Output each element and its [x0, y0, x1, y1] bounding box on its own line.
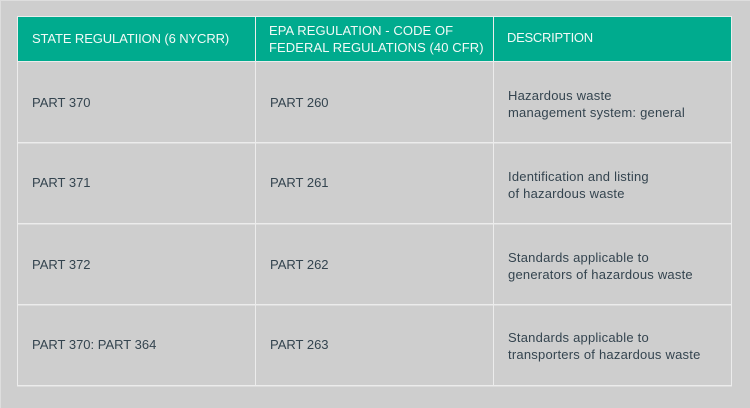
- row 4: state part: PART 370: PART 364: [32, 337, 156, 352]
- row 3: description: Standards applicable to: [508, 250, 649, 265]
- header: state regulation: STATE REGULATIION (6 NYCRR): [32, 31, 229, 46]
- row 4: description: transporters of hazardous waste: [508, 347, 701, 362]
- header: EPA regulation: EPA REGULATION - CODE OF: [269, 23, 453, 38]
- row 3: description: generators of hazardous waste: [508, 267, 693, 282]
- header: description: DESCRIPTION: [507, 30, 593, 45]
- row 2: state part: PART 371: [32, 175, 91, 190]
- table header band: [17, 16, 732, 62]
- row 4: description: Standards applicable to: [508, 330, 649, 345]
- row 1: state part: PART 370: [32, 95, 91, 110]
- row 3: description: [508, 250, 693, 282]
- row 1: description: management system: general: [508, 105, 685, 120]
- row 2: EPA part: PART 261: [270, 175, 329, 190]
- row 2: description: [508, 169, 649, 201]
- header: EPA regulation: FEDERAL REGULATIONS (40 CFR): [269, 40, 484, 55]
- row 4: EPA part: PART 263: [270, 337, 329, 352]
- row 2: description: of hazardous waste: [508, 186, 625, 201]
- row 3: EPA part: PART 262: [270, 257, 329, 272]
- row 2: description: Identification and listing: [508, 169, 649, 184]
- row 4: description: [508, 330, 701, 362]
- row 3: state part: PART 372: [32, 257, 91, 272]
- row 1: description: [508, 88, 685, 120]
- header: EPA regulation: [269, 23, 484, 55]
- row 1: description: Hazardous waste: [508, 88, 612, 103]
- row 1: EPA part: PART 260: [270, 95, 329, 110]
